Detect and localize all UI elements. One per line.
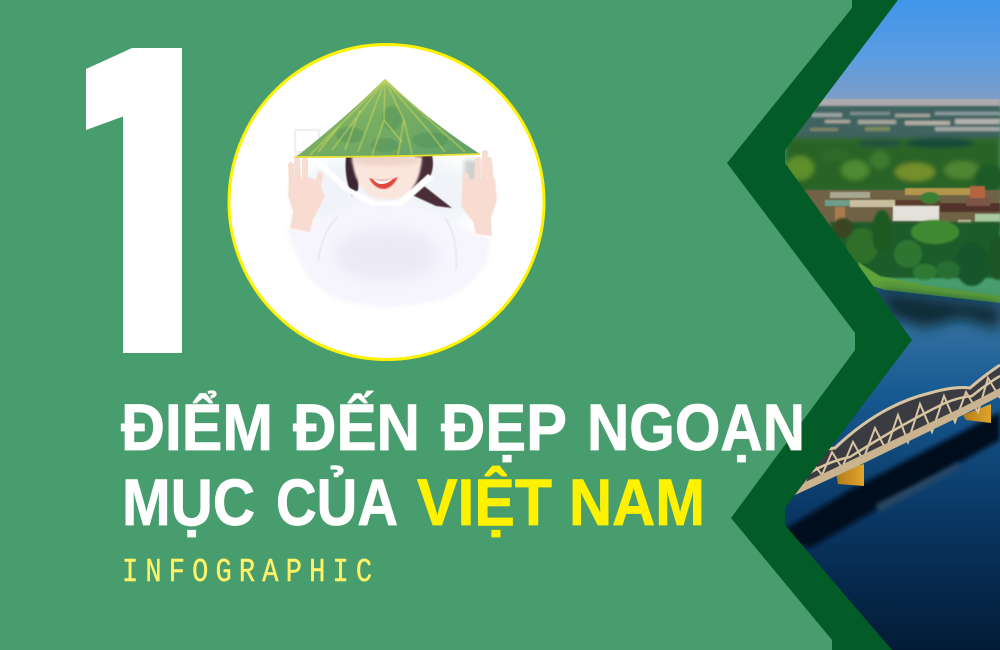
word: ĐIỂM (121, 391, 273, 464)
soft photo backdrop (308, 158, 466, 220)
truss fill (795, 365, 1000, 494)
river (770, 282, 1000, 650)
sky (770, 0, 1000, 101)
photo: Perfume River landscape (770, 0, 1000, 650)
title line 2 (122, 466, 705, 539)
hair (346, 155, 452, 208)
word: CỦA (276, 466, 398, 539)
word: NGOẠN (587, 391, 805, 464)
ao dai (290, 216, 488, 305)
subtitle: INFOGRAPHIC (122, 555, 372, 592)
title line 1 (121, 391, 805, 464)
circular portrait (229, 44, 544, 360)
horizon haze (800, 99, 1000, 107)
tree belt (785, 138, 1000, 193)
word: NAM (569, 466, 705, 539)
face (352, 157, 422, 200)
dark green chevron band (720, 0, 912, 650)
conical hat (296, 79, 480, 157)
circle frame (229, 44, 544, 360)
headscarf ties (320, 166, 434, 206)
pier right (963, 404, 991, 423)
foreground trees (830, 210, 1000, 286)
distant village (790, 106, 1000, 148)
pier left (836, 464, 864, 486)
bridge (795, 365, 1000, 495)
bridge shadow on water (770, 412, 1000, 548)
word: MỤC (122, 466, 255, 539)
hat rim (296, 154, 480, 157)
right hand (461, 153, 497, 236)
truss diagonals (795, 365, 1000, 482)
town (805, 186, 1000, 231)
river bank (858, 262, 1000, 303)
left hand (288, 157, 325, 232)
deck (795, 388, 1000, 495)
word: VIỆT (417, 466, 552, 539)
numeral 1 (86, 48, 182, 353)
word: ĐẾN (293, 391, 420, 464)
word: ĐẸP (441, 391, 567, 464)
tree reflections (878, 292, 1000, 330)
smile (369, 177, 398, 189)
